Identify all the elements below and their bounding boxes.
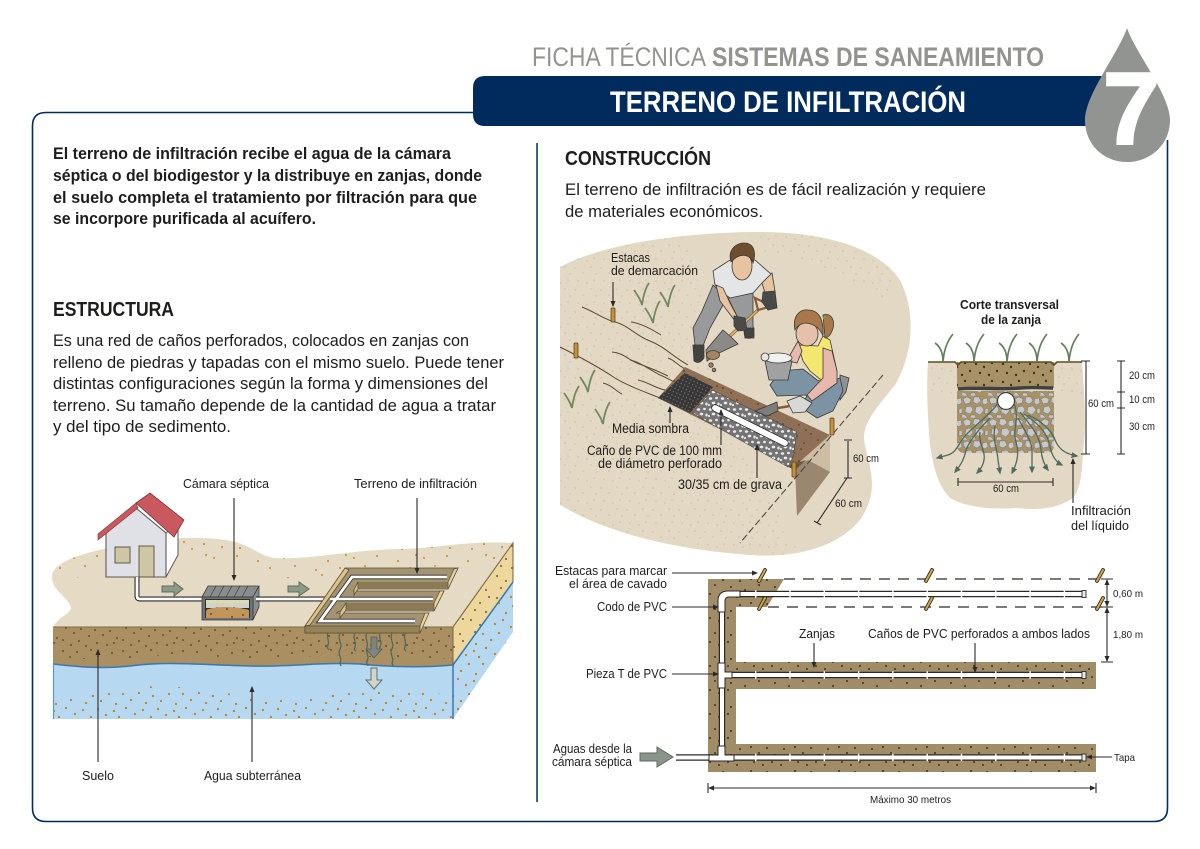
PVC pipes	[676, 594, 1086, 758]
label: aguas desde la cámara séptica: cámara séptica	[552, 754, 633, 769]
block side faces	[453, 543, 513, 719]
label: tapa: Tapa	[1114, 752, 1135, 764]
topsoil layer	[928, 362, 1082, 388]
text block: estructura: relleno de piedras y tapadas con el mismo suelo. Puede tener	[53, 353, 504, 372]
label: media sombra	[612, 407, 689, 436]
label: pieza T de PVC: Pieza T de PVC	[586, 666, 667, 681]
label: cámara séptica: Cámara séptica	[183, 476, 270, 491]
label: caño de PVC: Caño de PVC de 100 mm	[587, 443, 722, 458]
ground blob	[560, 232, 911, 556]
groundwater layer	[53, 664, 453, 719]
label: tapa	[1087, 752, 1135, 764]
back wall of trench	[658, 367, 830, 467]
pipe to field	[256, 596, 332, 602]
label: infiltración del líquido: Infiltración	[1071, 503, 1131, 518]
plants	[564, 283, 675, 424]
arrow: inflow	[640, 747, 673, 767]
panel frame	[32, 112, 1168, 822]
label: suelo	[82, 650, 114, 783]
label: aguas desde la cámara séptica	[552, 741, 633, 769]
diagram: system overview	[52, 476, 513, 783]
infiltration roots	[937, 403, 1077, 473]
label: estacas de demarcación	[611, 250, 698, 306]
perforated PVC pipe	[715, 408, 785, 443]
icon: numbered drop	[1085, 28, 1170, 166]
text block: estructura: terreno. Su tamaño depende de la cantidad de agua a tratar	[53, 396, 496, 415]
heading: construcción: CONSTRUCCIÓN	[565, 146, 711, 170]
pipe to field inner	[256, 598, 332, 600]
dimension: layers	[1117, 361, 1155, 454]
label: caño de PVC: de diámetro perforado	[598, 456, 722, 471]
label: pieza T de PVC	[586, 666, 718, 681]
dimension: maximum length	[708, 783, 1096, 806]
stake dashed lines	[768, 579, 1103, 607]
pipe from house	[137, 577, 203, 599]
label: infiltración del líquido: del líquido	[1071, 518, 1129, 533]
label: grava	[678, 445, 782, 492]
text block: estructura	[53, 331, 504, 436]
text block: estructura: y del tipo de sedimento.	[53, 417, 231, 436]
arrow: flow to chamber	[162, 582, 183, 596]
stakes	[574, 308, 834, 477]
label: zanjas: Zanjas	[799, 626, 835, 641]
text block: construcción: de materiales económicos.	[565, 202, 763, 221]
dimension: depth 60 cm: 60 cm	[853, 453, 879, 465]
dimension: 60 cm width	[958, 478, 1053, 495]
heading: corte transversal: Corte transversal	[960, 298, 1059, 312]
dimension: width 60 cm: 60 cm	[835, 498, 862, 510]
dimension: layers: 10 cm	[1129, 394, 1155, 406]
plants	[935, 334, 1079, 362]
stakes line	[740, 375, 883, 543]
label: estacas de demarcación: Estacas	[611, 250, 650, 265]
dimension: spacing: 1,80 m	[1113, 629, 1143, 641]
label: infiltración del líquido	[1071, 459, 1131, 533]
header: series title bold: SISTEMAS DE SANEAMIENTO	[712, 42, 1044, 72]
intro text	[53, 145, 482, 228]
text block: estructura: distintas configuraciones según la forma y dimensiones del	[53, 374, 488, 393]
trenches	[708, 579, 1096, 772]
arrow: down to groundwater	[366, 668, 382, 689]
media sombra band	[958, 388, 1053, 389]
ground marks	[560, 307, 688, 398]
title bar: TERRENO DE INFILTRACIÓN	[610, 85, 966, 119]
label: agua subterránea: Agua subterránea	[204, 768, 302, 783]
text block: construcción	[565, 180, 986, 221]
ground section	[927, 362, 1085, 509]
gravel layer	[957, 391, 1054, 453]
label: codo de PVC: Codo de PVC	[597, 599, 667, 614]
media sombra mesh	[658, 373, 713, 413]
intro text: el suelo completa el tratamiento por filtración para que	[53, 189, 477, 207]
label: suelo: Suelo	[82, 768, 114, 783]
label: caño de PVC	[587, 410, 722, 471]
infiltration field	[305, 568, 458, 633]
intro text: El terreno de infiltración recibe el agua de la cámara	[53, 145, 452, 163]
pipe end caps	[1082, 590, 1086, 761]
title bar	[473, 76, 1110, 126]
dimension: spacing: 0,60 m	[1113, 588, 1143, 600]
intro text: séptica o del biodigestor y la distribuye en zanjas, donde	[53, 167, 482, 185]
dimension: 60 cm depth	[1081, 361, 1114, 454]
pipe inner	[137, 577, 203, 599]
ground surface	[52, 538, 513, 627]
dimension: spacing	[1101, 579, 1143, 662]
trench cross cut	[786, 435, 830, 516]
text block: estructura: Es una red de caños perforados, colocados en zanjas con	[53, 331, 469, 350]
label: estacas para marcar	[555, 563, 757, 591]
arrow: flow to field	[288, 582, 309, 596]
diagram: trench construction scene	[560, 232, 911, 556]
label: codo de PVC	[597, 599, 718, 614]
heading: corte transversal	[960, 298, 1059, 327]
icon: numbered drop: 7	[1103, 52, 1160, 166]
heading: corte transversal: de la zanja	[981, 313, 1042, 327]
man with shovel	[693, 243, 777, 372]
label: terreno de infiltración	[354, 476, 477, 573]
header: series title: FICHA TÉCNICA	[532, 42, 706, 72]
gravel fill	[692, 390, 797, 467]
diagram: plan view	[552, 563, 1143, 806]
label: media sombra: Media sombra	[612, 421, 689, 436]
infiltration roots	[327, 633, 406, 666]
label: agua subterránea	[204, 687, 302, 783]
heading: estructura: ESTRUCTURA	[53, 299, 174, 321]
label: estacas para marcar: el área de cavado	[569, 576, 667, 591]
label: estacas para marcar: Estacas para marcar	[555, 563, 668, 578]
icon: house	[98, 493, 184, 577]
intro text: se incorpore purificada al acuífero.	[53, 210, 316, 228]
diagram: trench cross-section	[927, 298, 1155, 533]
pipe section	[998, 393, 1014, 409]
dimension: 60 cm depth: 60 cm	[1088, 398, 1114, 410]
label: caños de PVC: Caños de PVC perforados a ambos lados	[868, 626, 1090, 641]
label: estacas de demarcación: de demarcación	[611, 263, 698, 278]
dimension: 60 cm width: 60 cm	[993, 483, 1019, 495]
dimension: layers: 20 cm	[1129, 370, 1155, 382]
label: zanjas	[799, 626, 835, 667]
dimension: maximum length: Máximo 30 metros	[870, 795, 951, 806]
label: grava: 30/35 cm de grava	[678, 477, 782, 492]
stakes	[759, 570, 1103, 609]
dimension: width 60 cm	[814, 478, 862, 525]
woman with bucket	[755, 310, 849, 418]
soil layer	[53, 627, 453, 667]
label: terreno de infiltración: Terreno de infiltración	[354, 476, 477, 491]
dimension: layers: 30 cm	[1129, 421, 1155, 433]
label: cámara séptica	[183, 476, 270, 580]
text block: construcción: El terreno de infiltración es de fácil realización y requiere	[565, 180, 986, 199]
arrow: down through soil	[366, 637, 382, 658]
dimension: depth 60 cm	[844, 440, 879, 478]
icon: septic chamber	[202, 586, 259, 620]
PVC fittings	[709, 591, 740, 761]
label: aguas desde la cámara séptica: Aguas desde la	[553, 741, 633, 756]
